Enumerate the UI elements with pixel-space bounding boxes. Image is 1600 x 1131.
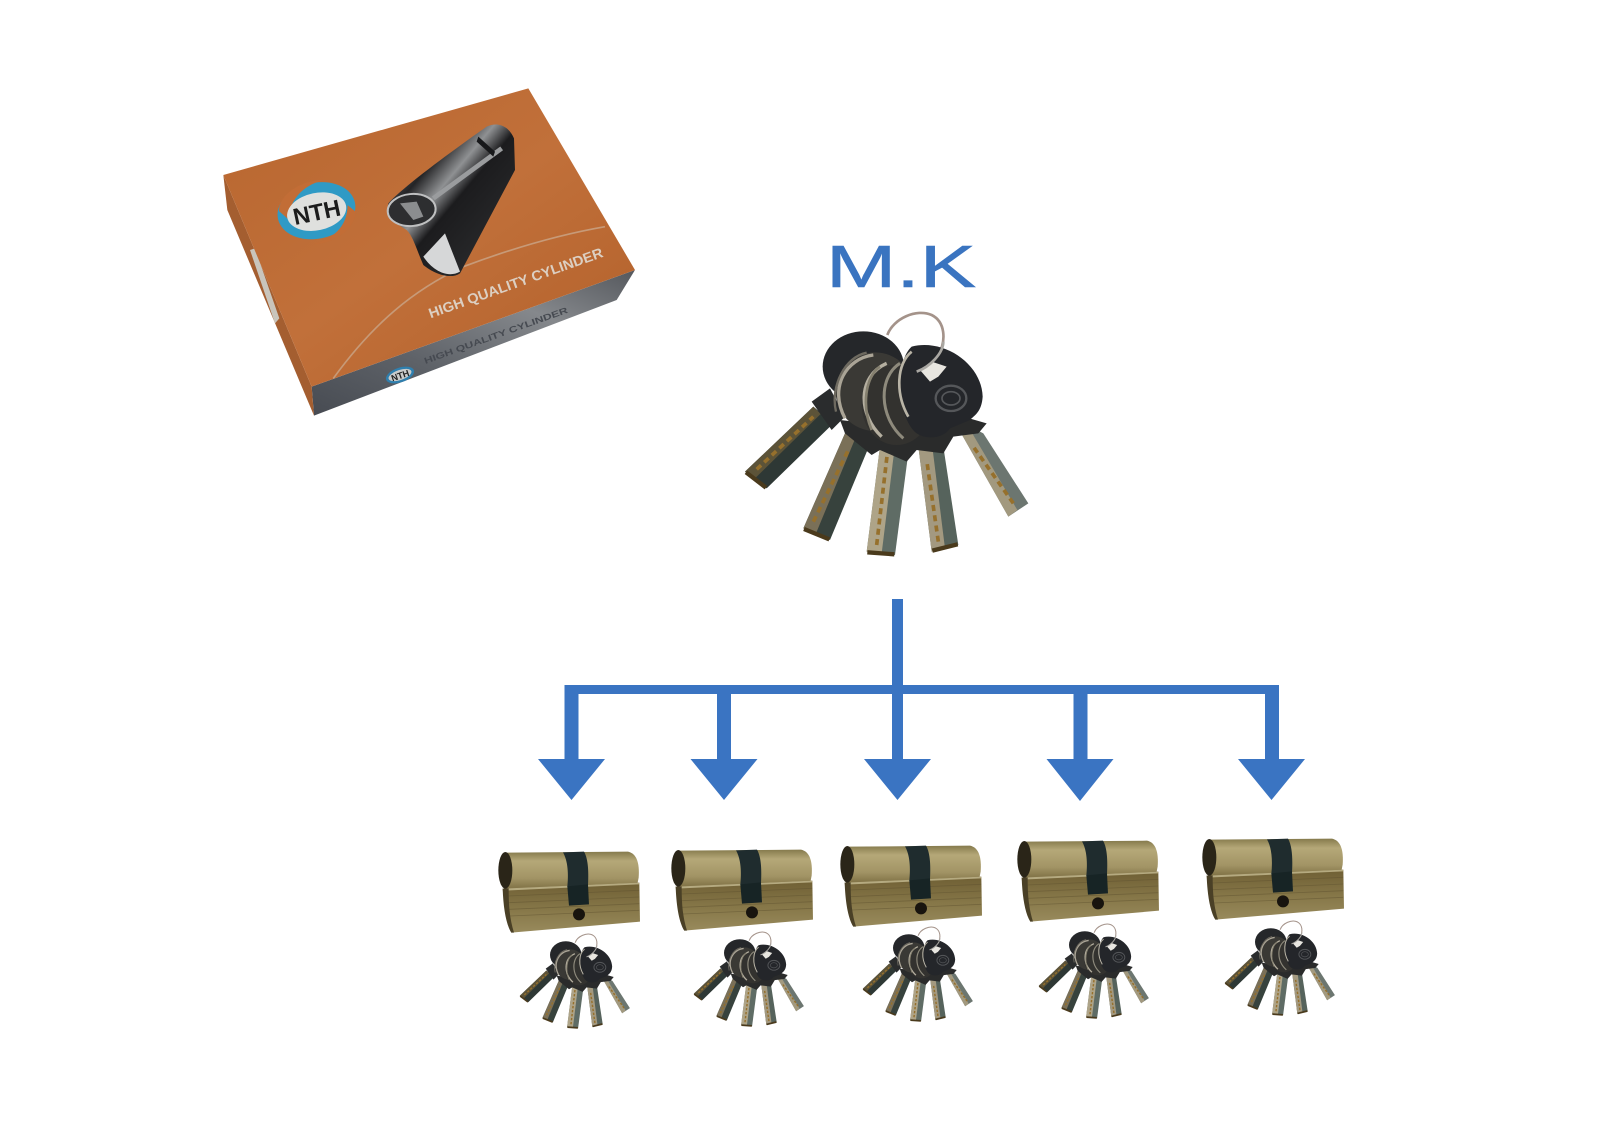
product box: NTH high quality cylinder: [223, 88, 635, 416]
end panel logo: [384, 363, 416, 387]
box slogan: HIGH QUALITY CYLINDER: [426, 244, 605, 321]
cylinder picture on box: [386, 124, 515, 276]
arrow 3: [864, 690, 931, 800]
box left side: [223, 175, 314, 416]
arrow 5: [1238, 685, 1305, 800]
cylinder 2 with keys: [671, 850, 813, 1026]
box grey end panel: [312, 270, 635, 416]
arrow 2: [690, 690, 758, 800]
cylinder 1 with keys: [498, 852, 640, 1028]
trunk line: [892, 599, 903, 689]
cylinder 3 with keys: [840, 846, 982, 1021]
cylinder 5 with keys: [1202, 839, 1344, 1015]
distribution arrows: [538, 599, 1305, 801]
cylinder 4 with keys: [1017, 841, 1159, 1018]
logo: NTH: NTH: [291, 195, 343, 230]
arrow 1: [538, 685, 605, 800]
box swoosh line: [333, 227, 605, 378]
horizontal bar: [564, 685, 1278, 694]
heading: M.K: M.K: [826, 234, 976, 300]
end panel slogan: HIGH QUALITY CYLINDER: [423, 305, 570, 366]
master key bunch: [745, 313, 1028, 555]
box orange lid: [223, 88, 635, 387]
box left side label: [250, 248, 279, 323]
end panel logo: NTH: [390, 368, 411, 383]
arrow 4: [1046, 690, 1114, 801]
logo: NTH: [272, 173, 362, 251]
